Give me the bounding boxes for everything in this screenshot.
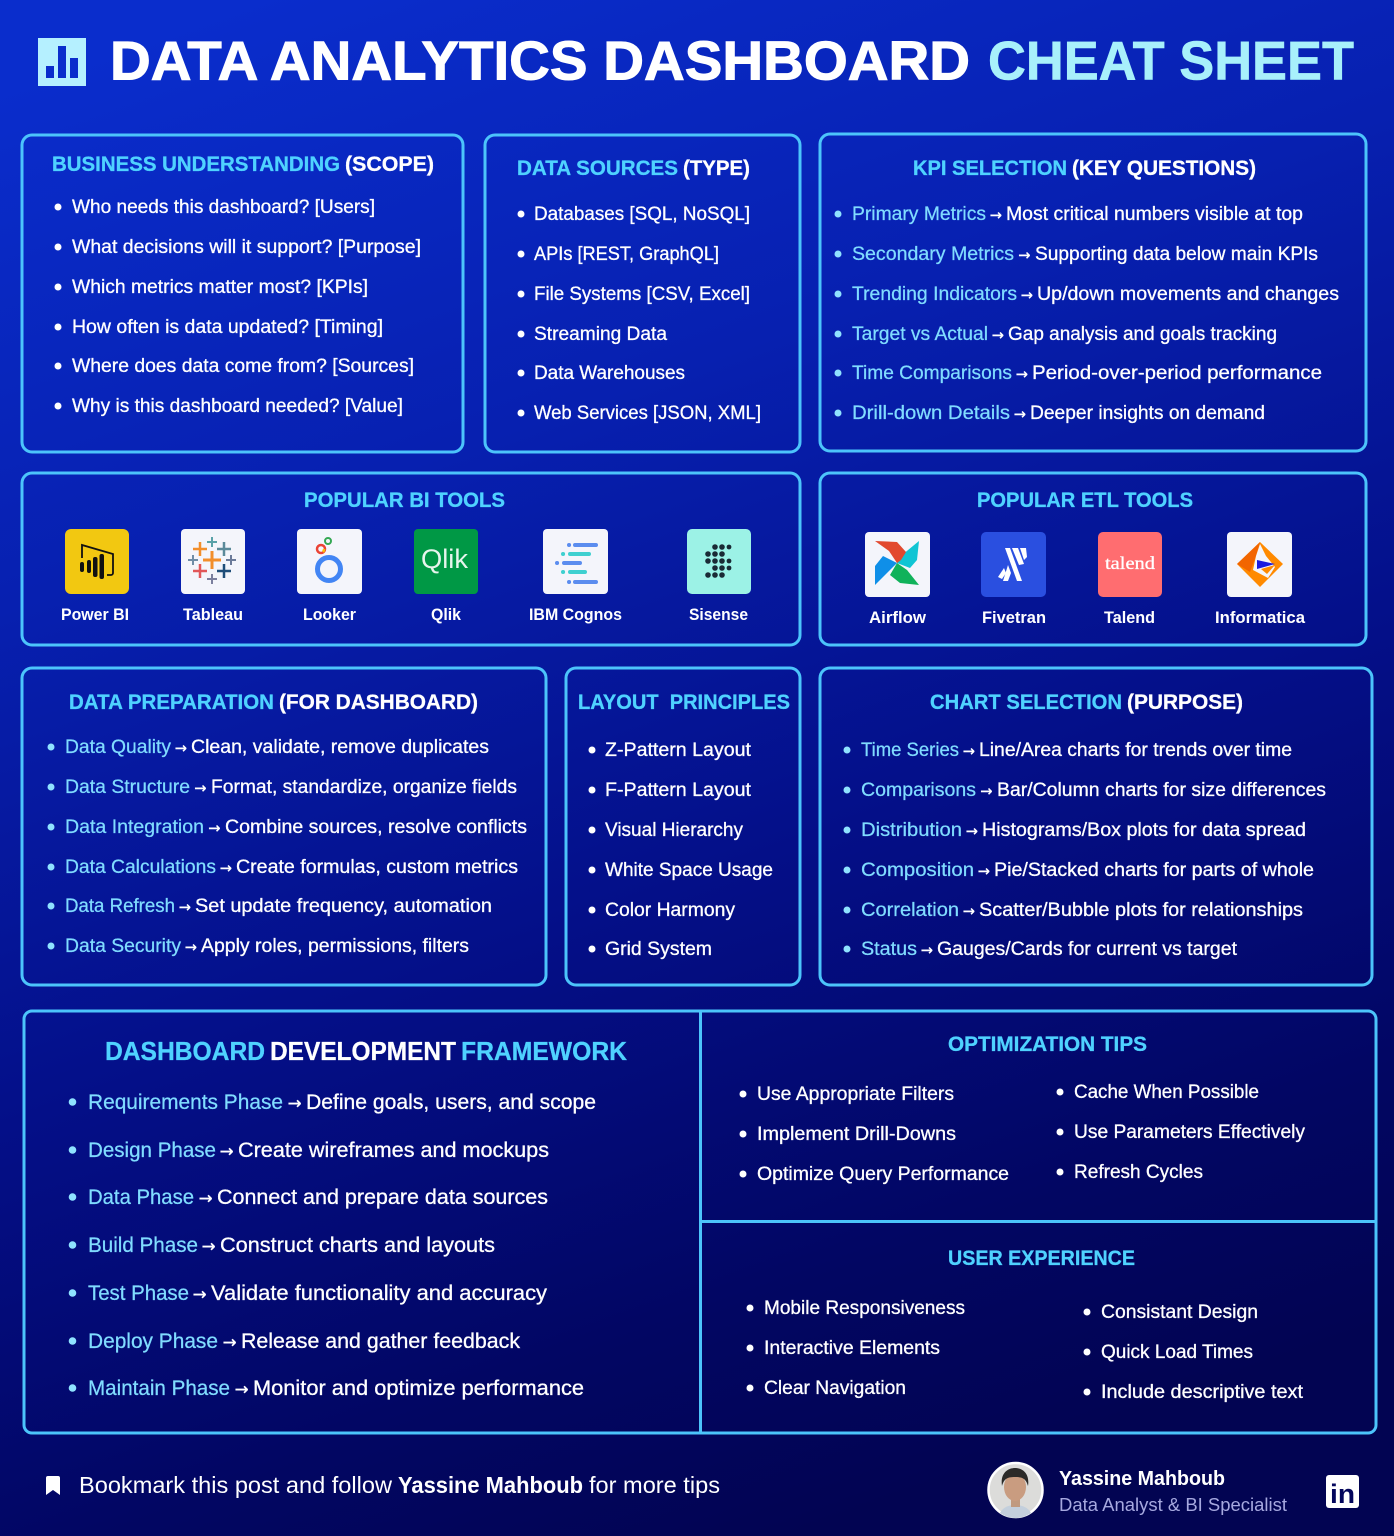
tool: ibm cognos: IBM Cognos (529, 606, 622, 624)
list: framework phases: → (202, 1237, 216, 1257)
list: chart purposes: Correlation (861, 900, 959, 921)
list: framework phases: Construct charts and layouts (220, 1233, 495, 1257)
panel: kpi selection (820, 134, 1366, 451)
list: preparation steps: Data Calculations (65, 857, 216, 878)
tool: looker (297, 529, 362, 624)
heading: optimization tips: OPTIMIZATION TIPS (948, 1033, 1147, 1056)
list: layout principles: F-Pattern Layout (605, 780, 752, 801)
list: kpi questions: Most critical numbers visible at top (1006, 204, 1303, 225)
tool: fivetran (981, 532, 1046, 627)
list: kpi questions: Primary Metrics (852, 204, 986, 225)
list: kpi questions: Supporting data below main KPIs (1035, 244, 1318, 265)
list: kpi questions: Secondary Metrics (852, 244, 1014, 265)
list: chart purposes: Line/Area charts for trends over time (979, 740, 1292, 761)
list: framework phases: Test Phase (88, 1281, 189, 1305)
list: preparation steps: Data Refresh (65, 896, 175, 917)
panel: data preparation (22, 668, 546, 985)
list: framework phases: → (288, 1094, 302, 1114)
icon: bar chart (38, 38, 86, 86)
list: chart purposes: → (966, 822, 978, 840)
tool: talend: talend (1105, 553, 1155, 573)
author name and role: Yassine Mahboub (1059, 1468, 1225, 1490)
icon: linkedin (1326, 1475, 1359, 1509)
section: dashboard development framework (69, 1036, 627, 1400)
list: preparation steps: Format, standardize, organize fields (211, 777, 517, 798)
list: kpi questions: → (1016, 365, 1028, 383)
heading: data preparation: (FOR DASHBOARD) (279, 691, 478, 714)
list: kpi questions: Deeper insights on demand (1030, 403, 1265, 424)
list: kpi questions: → (1014, 405, 1026, 423)
tool: talend (1098, 532, 1162, 627)
list: source types: APIs [REST, GraphQL] (534, 244, 719, 265)
list: framework phases: Maintain Phase (88, 1376, 230, 1400)
icon: bookmark (46, 1476, 60, 1495)
title text (110, 30, 1354, 92)
list: layout principles: Color Harmony (605, 900, 736, 921)
list: chart purposes: Bar/Column charts for size differences (997, 780, 1326, 801)
panel: popular bi tools (22, 473, 800, 645)
heading: framework (105, 1036, 627, 1066)
footer call to action (79, 1472, 720, 1498)
footer (46, 1463, 1359, 1518)
list: source types (518, 204, 761, 424)
list: kpi questions: → (1018, 246, 1031, 264)
list: kpi questions: → (992, 326, 1004, 344)
list: scope questions: Why is this dashboard needed? [Value] (72, 396, 403, 417)
heading: kpi selection (913, 157, 1256, 180)
tool: qlik: Qlik (431, 606, 462, 624)
list: framework phases: Design Phase (88, 1138, 216, 1162)
footer call to action: Bookmark this post and follow (79, 1472, 392, 1498)
list: framework phases: Connect and prepare data sources (217, 1185, 548, 1209)
panel: chart selection (820, 668, 1372, 985)
list: preparation steps: Data Integration (65, 817, 204, 838)
list: optimization tips right (1056, 1082, 1305, 1183)
list: source types: Web Services [JSON, XML] (534, 403, 761, 424)
icon: linkedin: in (1330, 1479, 1355, 1509)
list: framework phases: → (222, 1333, 237, 1353)
list: user experience right (1084, 1302, 1304, 1403)
list: preparation steps: Combine sources, resolve conflicts (225, 817, 527, 838)
heading: popular bi tools: POPULAR BI TOOLS (304, 489, 505, 512)
heading: chart selection: (PURPOSE) (1127, 691, 1243, 714)
list: scope questions: What decisions will it support? [Purpose] (72, 237, 421, 258)
list: chart purposes: Time Series (861, 740, 959, 761)
heading: framework: DASHBOARD (105, 1036, 265, 1066)
list: kpi questions: Drill-down Details (852, 403, 1010, 424)
tool: power bi (61, 529, 129, 624)
panel: bottom framework container (24, 1011, 1376, 1433)
tool: sisense: Sisense (689, 606, 748, 624)
tool: looker: Looker (303, 606, 357, 624)
list: preparation steps (48, 737, 527, 957)
list: framework phases (69, 1090, 596, 1400)
list: preparation steps: Set update frequency, automation (195, 896, 492, 917)
list: chart purposes: Histograms/Box plots for data spread (982, 820, 1306, 841)
list: framework phases: → (198, 1189, 213, 1209)
list: source types: Streaming Data (534, 324, 667, 345)
list: chart purposes: → (962, 902, 975, 920)
list: optimization tips left: Optimize Query Performance (757, 1164, 1009, 1185)
tool: power bi: Power BI (61, 606, 129, 624)
list: framework phases: Monitor and optimize performance (253, 1376, 584, 1400)
list: kpi questions (834, 204, 1339, 424)
list: preparation steps: → (220, 859, 232, 877)
tool: fivetran: Fivetran (982, 609, 1046, 627)
list: preparation steps: → (184, 938, 197, 956)
list: framework phases: Data Phase (88, 1185, 194, 1209)
section: user experience (746, 1247, 1304, 1403)
list: framework phases: Define goals, users, and scope (306, 1090, 596, 1114)
list: layout principles (588, 740, 773, 960)
heading: business understanding: (SCOPE) (345, 153, 434, 176)
list: chart purposes: Scatter/Bubble plots for relationships (979, 900, 1303, 921)
list: kpi questions: → (990, 206, 1002, 224)
list: preparation steps: → (208, 819, 221, 837)
list: user experience right: Include descriptive text (1101, 1382, 1304, 1403)
list: preparation steps: Data Structure (65, 777, 190, 798)
tool: airflow: Airflow (869, 609, 926, 627)
title text: DATA ANALYTICS DASHBOARD (110, 30, 970, 92)
tool: tableau (181, 529, 245, 624)
tool: sisense (687, 529, 751, 624)
author name and role: Data Analyst & BI Specialist (1059, 1495, 1287, 1515)
list: kpi questions: → (1020, 286, 1033, 304)
list: chart purposes: → (978, 862, 990, 880)
list: preparation steps: → (178, 898, 191, 916)
heading: business understanding: BUSINESS UNDERSTANDING (52, 153, 340, 176)
list: kpi questions: Target vs Actual (852, 324, 988, 345)
author avatar (988, 1463, 1042, 1518)
list: chart purposes: Pie/Stacked charts for parts of whole (994, 860, 1314, 881)
list: chart purposes: → (962, 742, 975, 760)
list: optimization tips left: Implement Drill-Downs (757, 1124, 956, 1145)
list: user experience left: Mobile Responsiveness (764, 1298, 965, 1319)
list: chart purposes: Status (861, 939, 917, 960)
section: optimization tips (740, 1033, 1305, 1185)
tool: qlik: Qlik (421, 544, 469, 574)
list: optimization tips right: Refresh Cycles (1074, 1162, 1203, 1183)
list: preparation steps: Create formulas, custom metrics (236, 857, 518, 878)
list: framework phases: Requirements Phase (88, 1090, 283, 1114)
heading: chart selection (930, 691, 1243, 714)
list: framework phases: Deploy Phase (88, 1329, 218, 1353)
panel: popular etl tools (820, 473, 1366, 645)
tool: ibm cognos (529, 529, 622, 624)
panel: layout principles (566, 668, 800, 985)
list: preparation steps: → (174, 739, 187, 757)
tool: qlik (414, 529, 478, 624)
list: framework phases: Build Phase (88, 1233, 198, 1257)
heading: framework: DEVELOPMENT (270, 1036, 456, 1066)
list: kpi questions: Period-over-period performance (1032, 363, 1322, 384)
list: preparation steps: Data Security (65, 936, 182, 957)
list: kpi questions: Gap analysis and goals tracking (1008, 324, 1277, 345)
title text: CHEAT SHEET (988, 30, 1354, 92)
list: framework phases: → (220, 1142, 234, 1162)
author name and role (1059, 1468, 1287, 1515)
list: layout principles: Z-Pattern Layout (605, 740, 752, 761)
footer call to action: for more tips (589, 1472, 720, 1498)
heading: data preparation: DATA PREPARATION (69, 691, 274, 714)
panel: business understanding (22, 135, 463, 452)
list: user experience right: Quick Load Times (1101, 1342, 1253, 1363)
list: layout principles: Visual Hierarchy (605, 820, 743, 841)
list: kpi questions: Trending Indicators (852, 284, 1017, 305)
title (38, 30, 1354, 92)
list: chart purposes: → (980, 782, 993, 800)
list: user experience left: Clear Navigation (764, 1378, 906, 1399)
tool: airflow (865, 532, 930, 627)
list: scope questions: Which metrics matter most? [KPIs] (72, 277, 368, 298)
list: optimization tips right: Cache When Possible (1074, 1082, 1259, 1103)
heading: framework: FRAMEWORK (461, 1036, 627, 1066)
list: scope questions: How often is data updated? [Timing] (72, 317, 383, 338)
list: preparation steps: → (194, 779, 207, 797)
list: optimization tips left: Use Appropriate Filters (757, 1084, 954, 1105)
heading: kpi selection: KPI SELECTION (913, 157, 1067, 180)
list: preparation steps: Apply roles, permissions, filters (201, 936, 469, 957)
tool: tableau: Tableau (183, 606, 243, 624)
list: kpi questions: Time Comparisons (852, 363, 1012, 384)
list: chart purposes: Distribution (861, 820, 962, 841)
tool: talend: Talend (1104, 609, 1155, 627)
heading: chart selection: CHART SELECTION (930, 691, 1122, 714)
list: chart purposes: Gauges/Cards for current vs target (937, 939, 1238, 960)
list: layout principles: White Space Usage (605, 860, 773, 881)
list: preparation steps: Clean, validate, remove duplicates (191, 737, 489, 758)
list: preparation steps: Data Quality (65, 737, 172, 758)
heading: data sources: (TYPE) (683, 157, 750, 180)
list: optimization tips left (740, 1084, 1009, 1185)
list: source types: File Systems [CSV, Excel] (534, 284, 750, 305)
list: chart purposes (844, 740, 1326, 960)
list: user experience left: Interactive Elements (764, 1338, 940, 1359)
list: framework phases: Validate functionality and accuracy (211, 1281, 547, 1305)
heading: kpi selection: (KEY QUESTIONS) (1072, 157, 1256, 180)
list: scope questions: Where does data come from? [Sources] (72, 356, 414, 377)
list: scope questions: Who needs this dashboard? [Users] (72, 197, 375, 218)
tool: informatica (1215, 532, 1306, 627)
list: framework phases: → (192, 1285, 207, 1305)
heading: popular etl tools: POPULAR ETL TOOLS (977, 489, 1193, 512)
list: kpi questions: Up/down movements and changes (1037, 284, 1339, 305)
list: chart purposes: Comparisons (861, 780, 976, 801)
list: optimization tips right: Use Parameters Effectively (1074, 1122, 1305, 1143)
list: layout principles: Grid System (605, 939, 712, 960)
heading: data sources: DATA SOURCES (517, 157, 678, 180)
panel: data sources (485, 135, 800, 452)
heading: layout principles: LAYOUT PRINCIPLES (578, 691, 790, 714)
heading: user experience: USER EXPERIENCE (948, 1247, 1135, 1270)
heading: data preparation (69, 691, 478, 714)
list: chart purposes: → (920, 941, 933, 959)
list: chart purposes: Composition (861, 860, 974, 881)
list: framework phases: → (234, 1380, 249, 1400)
list: user experience left (746, 1298, 965, 1399)
list: source types: Databases [SQL, NoSQL] (534, 204, 750, 225)
list: scope questions (54, 197, 421, 417)
tool: informatica: Informatica (1215, 609, 1306, 627)
list: source types: Data Warehouses (534, 363, 685, 384)
list: framework phases: Create wireframes and mockups (238, 1138, 549, 1162)
list: framework phases: Release and gather feedback (241, 1329, 520, 1353)
list: user experience right: Consistant Design (1101, 1302, 1258, 1323)
footer call to action: Yassine Mahboub (398, 1472, 583, 1498)
